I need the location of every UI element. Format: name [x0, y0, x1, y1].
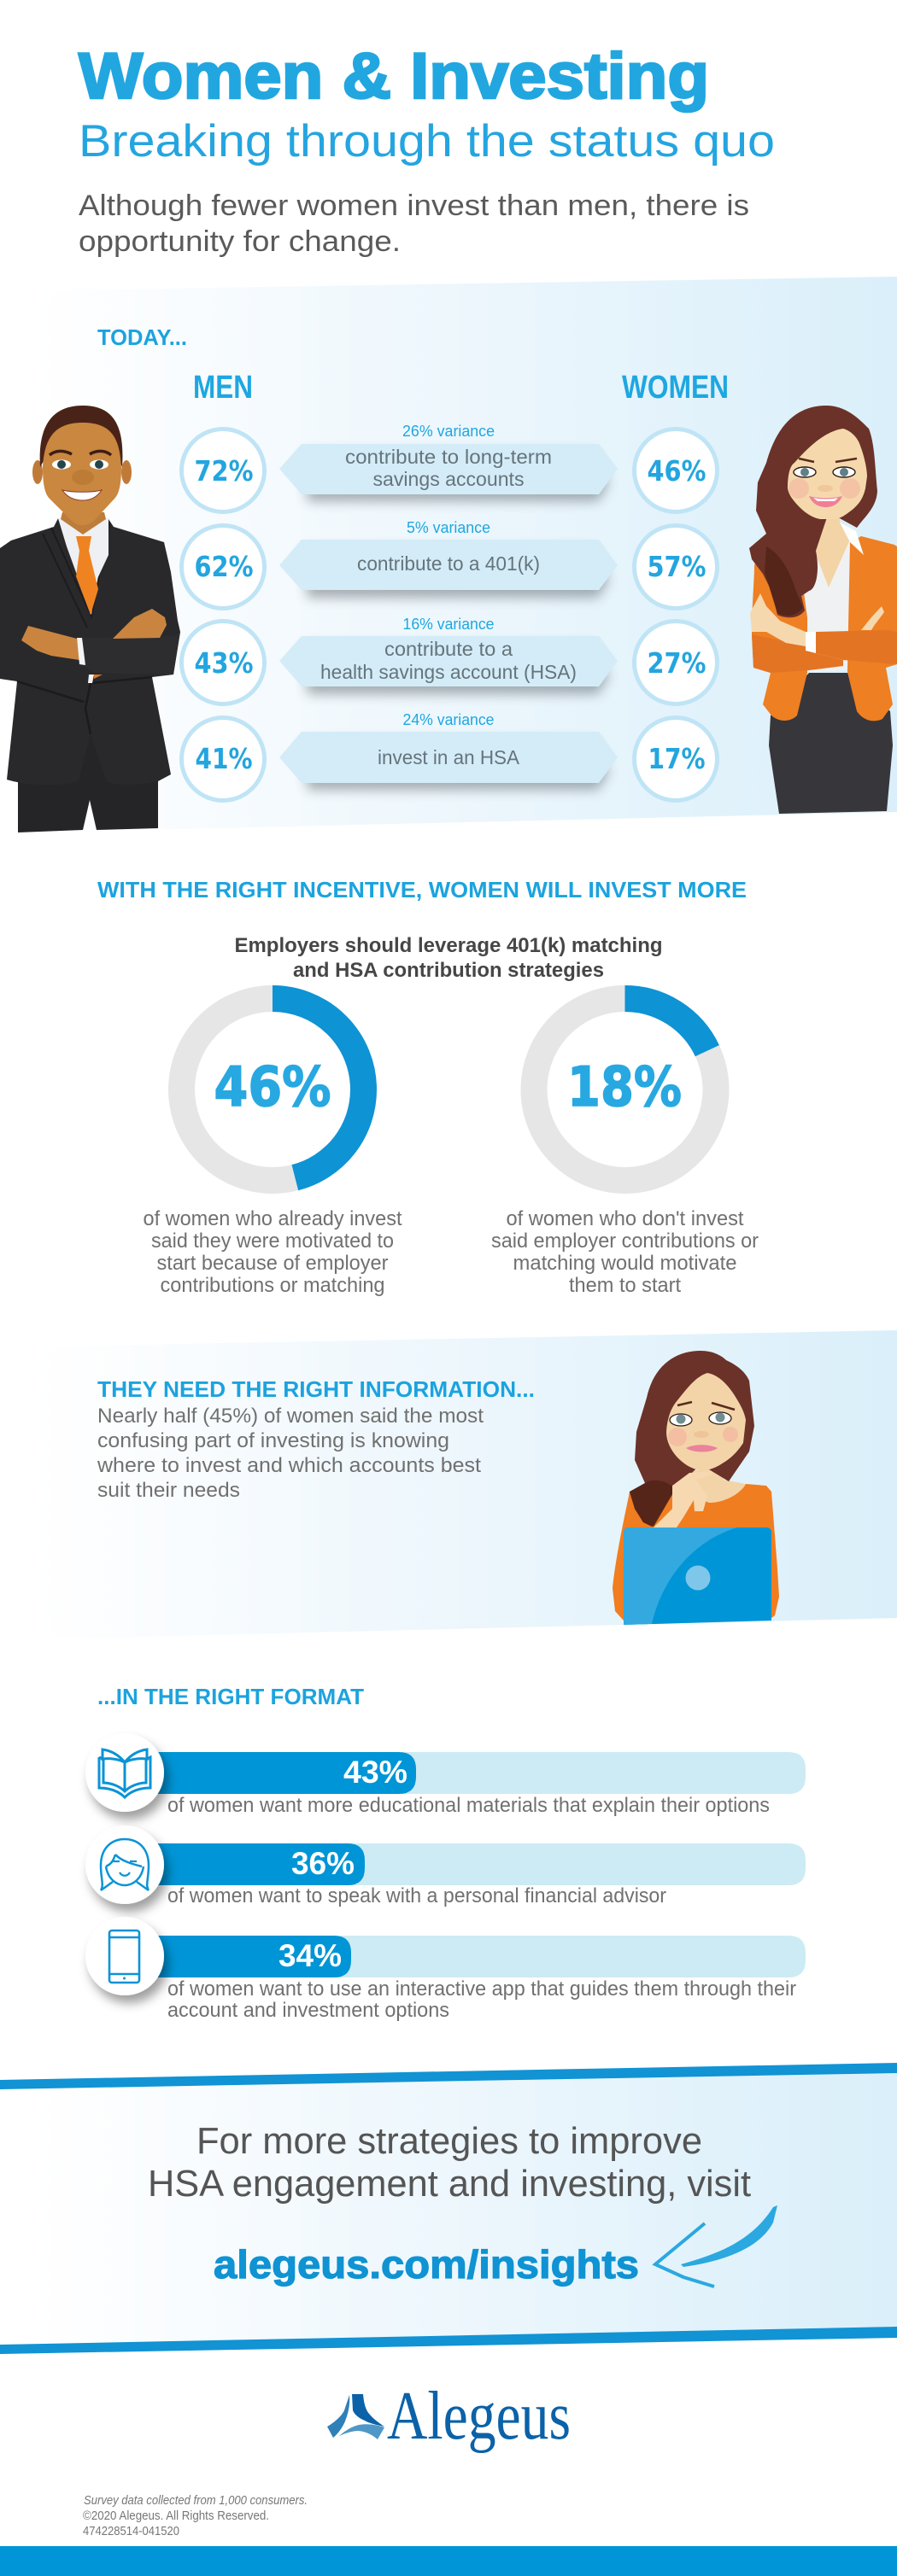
intro text: opportunity for change.	[79, 225, 401, 258]
variance label: 26% variance	[402, 423, 495, 440]
body text: confusing part of investing is knowing	[97, 1429, 449, 1452]
row: 401(k)	[181, 519, 718, 608]
donut caption: right: matching would motivate	[513, 1252, 736, 1275]
logo: Alegeus: Alegeus	[387, 2379, 571, 2454]
men 62%: 62%	[195, 550, 253, 583]
bar track	[145, 1843, 806, 1885]
row: health savings account	[181, 616, 718, 704]
donut caption: right: said employer contributions or	[491, 1230, 759, 1253]
banner: contribute to a 401(k)	[357, 552, 540, 575]
illustration: thinking woman with laptop	[613, 1351, 779, 1625]
caption	[167, 1977, 796, 2022]
bar track	[145, 1752, 806, 1794]
donut caption: left	[144, 1207, 402, 1297]
row: long-term savings accounts	[181, 423, 718, 512]
bar row: financial advisor	[85, 1825, 806, 1907]
donut chart: 18%	[534, 999, 716, 1180]
heading: today: TODAY...	[97, 324, 187, 350]
icon: phone	[85, 1917, 164, 1995]
subheading: employers	[234, 934, 663, 982]
intro text	[79, 190, 749, 258]
bar value	[145, 1752, 416, 1794]
footer bar	[0, 2546, 897, 2576]
heading: men: MEN	[193, 370, 253, 406]
donut caption: right	[491, 1207, 759, 1297]
icon: book	[85, 1733, 164, 1812]
women 27%	[634, 622, 718, 704]
footer notes: Survey data collected from 1,000 consumers.	[84, 2493, 308, 2508]
caption: of women want to speak with a personal financial advisor	[167, 1884, 666, 1907]
subheading: employers: Employers should leverage 401(k) matching	[234, 934, 663, 957]
bar row: educational materials	[85, 1733, 806, 1817]
men 41%: 41%	[195, 742, 253, 775]
heading: right information: THEY NEED THE RIGHT INFORMATION...	[97, 1376, 535, 1402]
subheading: employers: and HSA contribution strategies	[293, 959, 604, 982]
men 62%	[181, 526, 265, 608]
percentage: 36%	[291, 1846, 355, 1881]
footer notes: 474228514-041520	[83, 2524, 179, 2538]
donut chart: 46%: 46%	[214, 1056, 331, 1119]
variance label: 16% variance	[403, 616, 494, 633]
body text: suit their needs	[97, 1479, 240, 1502]
women 46%	[634, 429, 718, 512]
panel: call to action	[0, 2063, 897, 2354]
donut caption: left: said they were motivated to	[151, 1230, 394, 1253]
logo: Alegeus	[327, 2379, 571, 2454]
women 17%: 17%	[648, 742, 706, 775]
men 72%: 72%	[195, 454, 253, 488]
women 57%	[634, 526, 718, 608]
banner	[279, 540, 618, 598]
icon: woman advisor	[85, 1825, 164, 1904]
variance label: 5% variance	[407, 519, 490, 536]
banner: health savings account (HSA)	[320, 661, 577, 683]
illustration: man	[0, 406, 180, 832]
donut chart: 18%: 18%	[567, 1056, 682, 1119]
variance label: 24% variance	[403, 711, 494, 728]
donut caption: left: contributions or matching	[161, 1274, 384, 1297]
body text: where to invest and which accounts best	[97, 1454, 481, 1477]
percentage: 34%	[278, 1938, 342, 1973]
banner: contribute to long-term	[345, 446, 552, 468]
men 41%	[181, 717, 265, 801]
call to action text: HSA engagement and investing, visit	[148, 2163, 751, 2205]
caption: of women want to use an interactive app that guides them through their	[167, 1977, 796, 2001]
caption: account and investment options	[167, 1999, 449, 2022]
banner	[279, 732, 618, 790]
women 57%: 57%	[648, 550, 706, 583]
link text: alegeus.com/insights	[214, 2242, 639, 2287]
banner	[279, 444, 618, 501]
body text: Nearly half (45%) of women said the most	[97, 1405, 484, 1428]
banner: contribute to a	[384, 638, 513, 660]
women 17%	[634, 717, 718, 801]
donut chart: 46%	[181, 999, 364, 1180]
caption: of women want more educational materials that explain their options	[167, 1794, 770, 1817]
percentage: 43%	[343, 1755, 407, 1790]
call to action text: For more strategies to improve	[196, 2120, 702, 2162]
banner	[279, 636, 618, 694]
body text	[97, 1405, 484, 1502]
footer notes: ©2020 Alegeus. All Rights Reserved.	[83, 2509, 269, 2523]
bar value	[145, 1843, 365, 1885]
bar value	[145, 1936, 351, 1977]
men 43%	[181, 622, 265, 704]
men 72%	[181, 429, 265, 512]
donut caption: left: start because of employer	[157, 1252, 389, 1275]
intro text: Although fewer women invest than men, there is	[79, 190, 749, 222]
banner: invest in an HSA	[378, 746, 520, 768]
women 27%: 27%	[648, 646, 706, 680]
footer notes	[83, 2493, 308, 2538]
donut caption: right: of women who don't invest	[506, 1207, 744, 1230]
bar track	[145, 1936, 806, 1977]
heading: women: WOMEN	[622, 370, 729, 406]
panel: today comparison	[0, 277, 897, 833]
heading: right format: ...IN THE RIGHT FORMAT	[97, 1684, 364, 1709]
row: invest in an HSA	[181, 711, 718, 801]
title: Women & Investing	[79, 40, 709, 113]
donut caption: left: of women who already invest	[144, 1207, 402, 1230]
banner: savings accounts	[372, 468, 525, 490]
arrow	[655, 2205, 777, 2287]
women 46%: 46%	[648, 454, 706, 488]
men 43%: 43%	[195, 646, 253, 680]
call to action text	[148, 2120, 751, 2205]
illustration: woman with crossed arms	[749, 406, 897, 814]
subtitle: Breaking through the status quo	[79, 116, 775, 166]
donut caption: right: them to start	[569, 1274, 681, 1297]
panel: right information	[0, 1330, 897, 1640]
heading: right incentive: WITH THE RIGHT INCENTIVE, WOMEN WILL INVEST MORE	[97, 877, 747, 902]
bar row: interactive app	[85, 1917, 806, 2022]
